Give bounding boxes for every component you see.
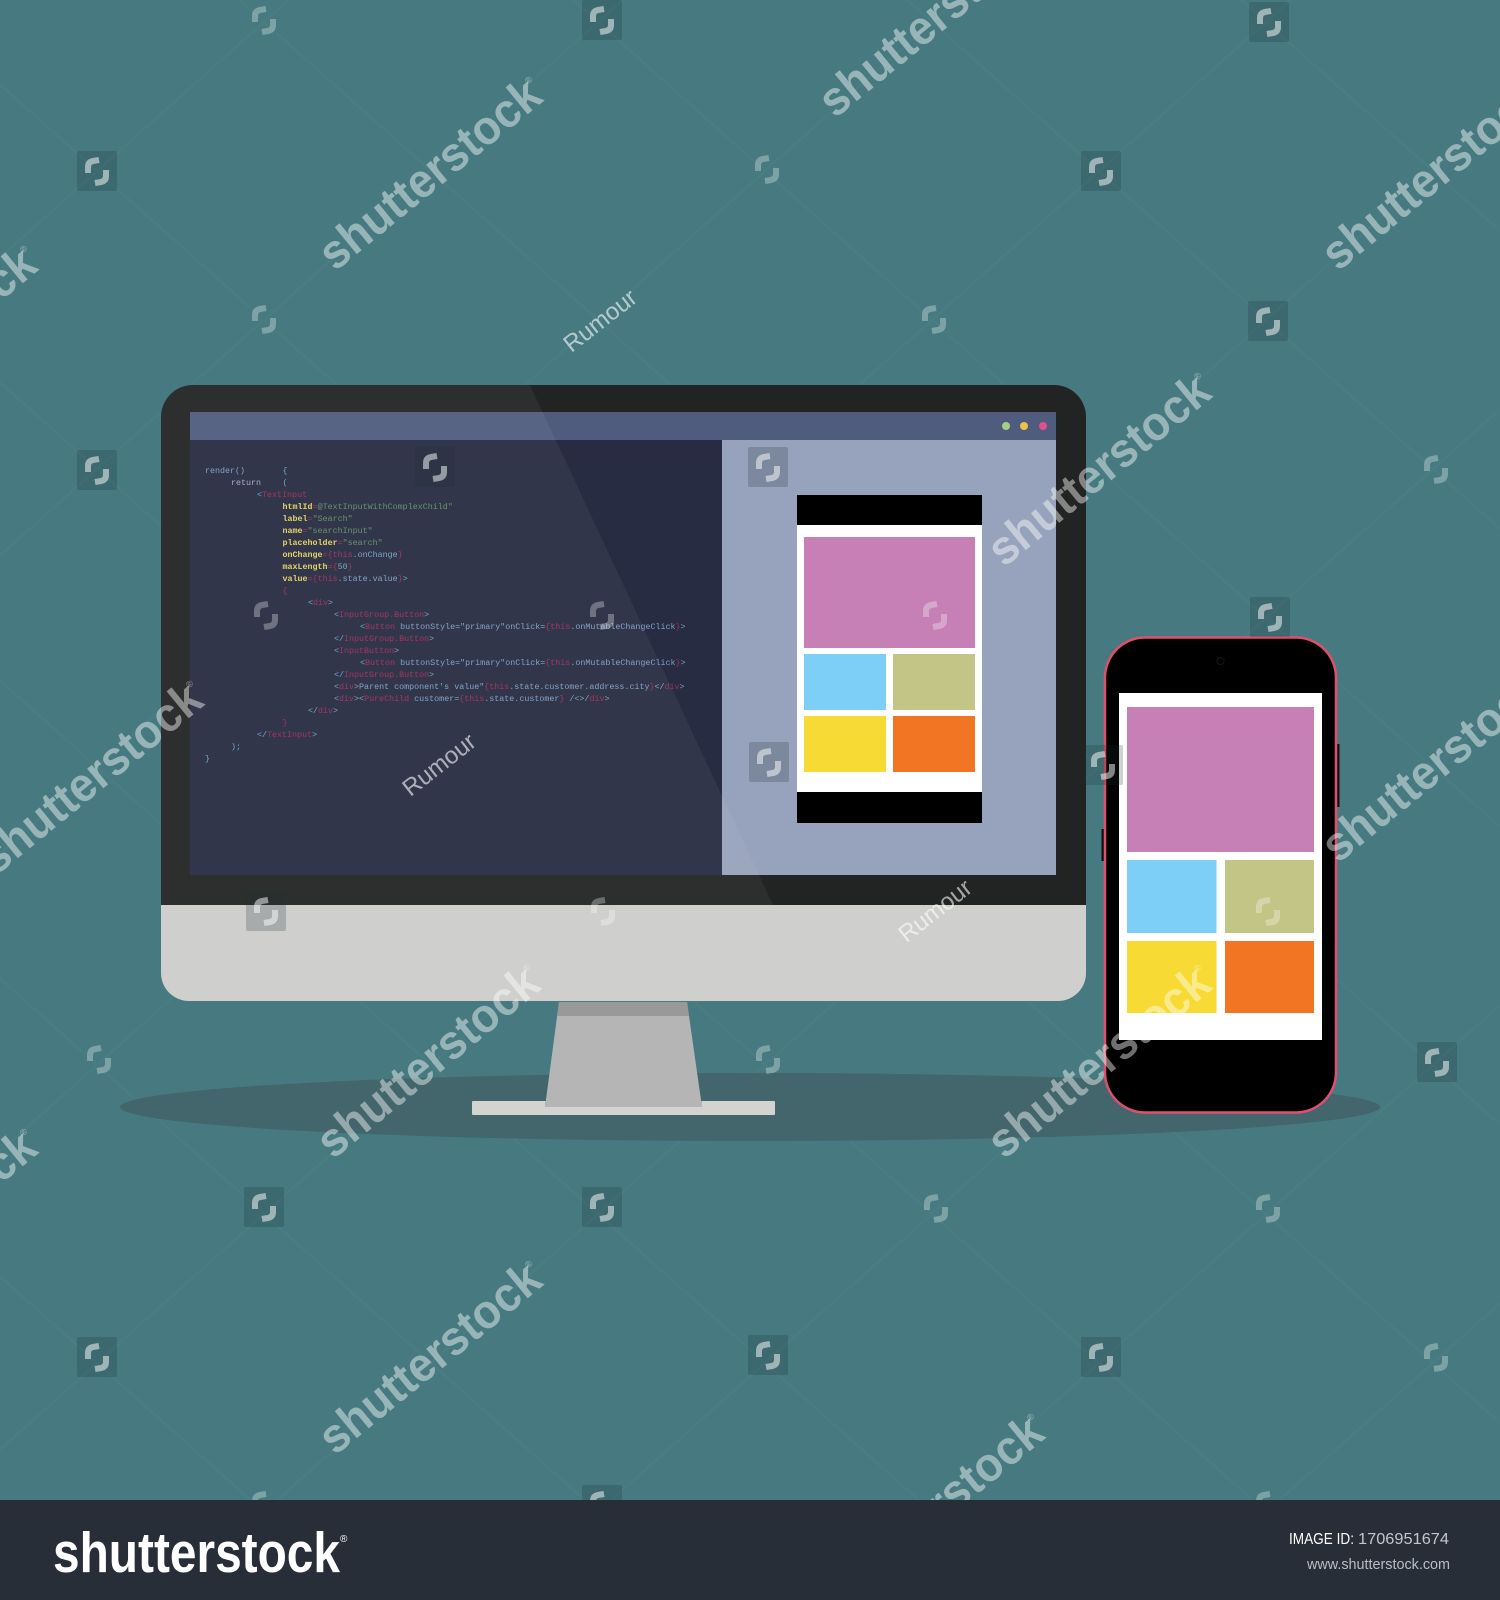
monitor bezel: [161, 385, 1086, 905]
screen glare: [161, 385, 773, 905]
code listing: </TextInput>: [257, 730, 317, 740]
code listing: {: [282, 586, 288, 596]
code listing: <Button buttonStyle="primary"onClick={this.onMutableChangeClick}>: [360, 658, 686, 668]
watermark: shutterstock text: shutterstock: [306, 956, 550, 1169]
ground shadow: [120, 1073, 1380, 1141]
footer logo: ®: [340, 1534, 348, 1545]
monitor stand: [472, 1002, 775, 1115]
phone olive block: [1225, 860, 1314, 933]
editor toolbar: [190, 412, 1056, 440]
watermark: shutterstock text: ®: [18, 243, 30, 255]
code listing: [205, 466, 686, 764]
code listing: <Button buttonStyle="primary"onClick={this.onMutableChangeClick}>: [360, 622, 686, 632]
phone screen: [1119, 693, 1322, 1040]
watermark: Rumour labels: Rumour: [558, 284, 642, 358]
phone orange block: [1225, 941, 1314, 1013]
image id: [1289, 1531, 1449, 1548]
watermark: shutterstock text: shutterstock: [308, 68, 552, 281]
footer bar: [0, 1500, 1500, 1600]
watermark: shutterstock text: shutterstock: [308, 1252, 552, 1465]
preview orange block: [893, 716, 975, 772]
code listing: onChange={this.onChange}: [282, 550, 403, 560]
code listing: <div><PureChild customer={this.state.customer} /<>/div>: [334, 694, 609, 704]
code listing: label="Search": [282, 514, 353, 524]
phone yellow block: [1127, 941, 1216, 1013]
image id: 1706951674: [1358, 1531, 1449, 1548]
phone side buttons: [1102, 744, 1340, 861]
watermark: shutterstock text: shutterstock: [977, 956, 1221, 1169]
toolbar dot green: [1002, 422, 1010, 430]
code listing: <InputButton>: [334, 646, 399, 656]
code listing: {: [282, 466, 288, 476]
preview blue block: [804, 654, 886, 710]
watermark: Rumour labels: Rumour: [893, 874, 977, 948]
code listing: return: [231, 478, 261, 488]
code listing: }: [205, 754, 210, 764]
code listing: render(): [205, 466, 245, 476]
code listing: (: [282, 478, 288, 488]
watermark: shutterstock text: shutterstock: [977, 364, 1221, 577]
code listing: </InputGroup.Button>: [334, 634, 434, 644]
image id: IMAGE ID:: [1289, 1531, 1354, 1548]
watermark: shutterstock text: ®: [1192, 962, 1204, 974]
phone camera: [1217, 658, 1224, 664]
preview olive block: [893, 654, 975, 710]
toolbar dot pink: [1039, 422, 1047, 430]
toolbar dot yellow: [1020, 422, 1028, 430]
smartphone: [1102, 638, 1340, 1112]
watermark: shutterstock text: ®: [1025, 1411, 1037, 1423]
code listing: </div>: [308, 706, 338, 716]
desktop monitor: [161, 385, 1086, 1115]
phone hero block: [1127, 707, 1314, 852]
code listing: <InputGroup.Button>: [334, 610, 429, 620]
watermark: Rumour labels: [397, 284, 977, 948]
code panel: [190, 440, 722, 875]
watermark: shutterstock text: ®: [521, 962, 533, 974]
code listing: }: [282, 718, 288, 728]
code listing: <TextInput: [257, 490, 307, 500]
website: www.shutterstock.com: [1306, 1556, 1450, 1573]
desktop preview wireframe: [797, 495, 982, 823]
code listing: <div>: [308, 598, 333, 608]
code listing: name="searchInput": [282, 526, 373, 536]
code listing: placeholder="search": [282, 538, 383, 548]
code listing: </InputGroup.Button>: [334, 670, 434, 680]
code listing: value={this.state.value}>: [282, 574, 408, 584]
preview hero block: [804, 537, 975, 648]
code listing: htmlId=@TextInputWithComplexChild": [282, 502, 453, 512]
phone blue block: [1127, 860, 1216, 933]
watermark: shutterstock text: ®: [184, 678, 196, 690]
code listing: );: [231, 742, 241, 752]
code listing: <div>Parent component's value"{this.state.customer.address.city}</div>: [334, 682, 685, 692]
phone body: [1105, 638, 1336, 1112]
watermark: shutterstock text: ®: [523, 1258, 535, 1270]
watermark: shutterstock text: ®: [18, 1126, 30, 1138]
code listing: maxLength={50}: [282, 562, 353, 572]
preview yellow block: [804, 716, 886, 772]
preview panel: [722, 440, 1056, 875]
footer logo: shutterstock: [53, 1521, 340, 1585]
watermark: Rumour labels: Rumour: [397, 728, 481, 802]
monitor chin: [161, 905, 1086, 1001]
watermark: shutterstock text: ®: [523, 74, 535, 86]
watermark: shutterstock text: ®: [1192, 370, 1204, 382]
